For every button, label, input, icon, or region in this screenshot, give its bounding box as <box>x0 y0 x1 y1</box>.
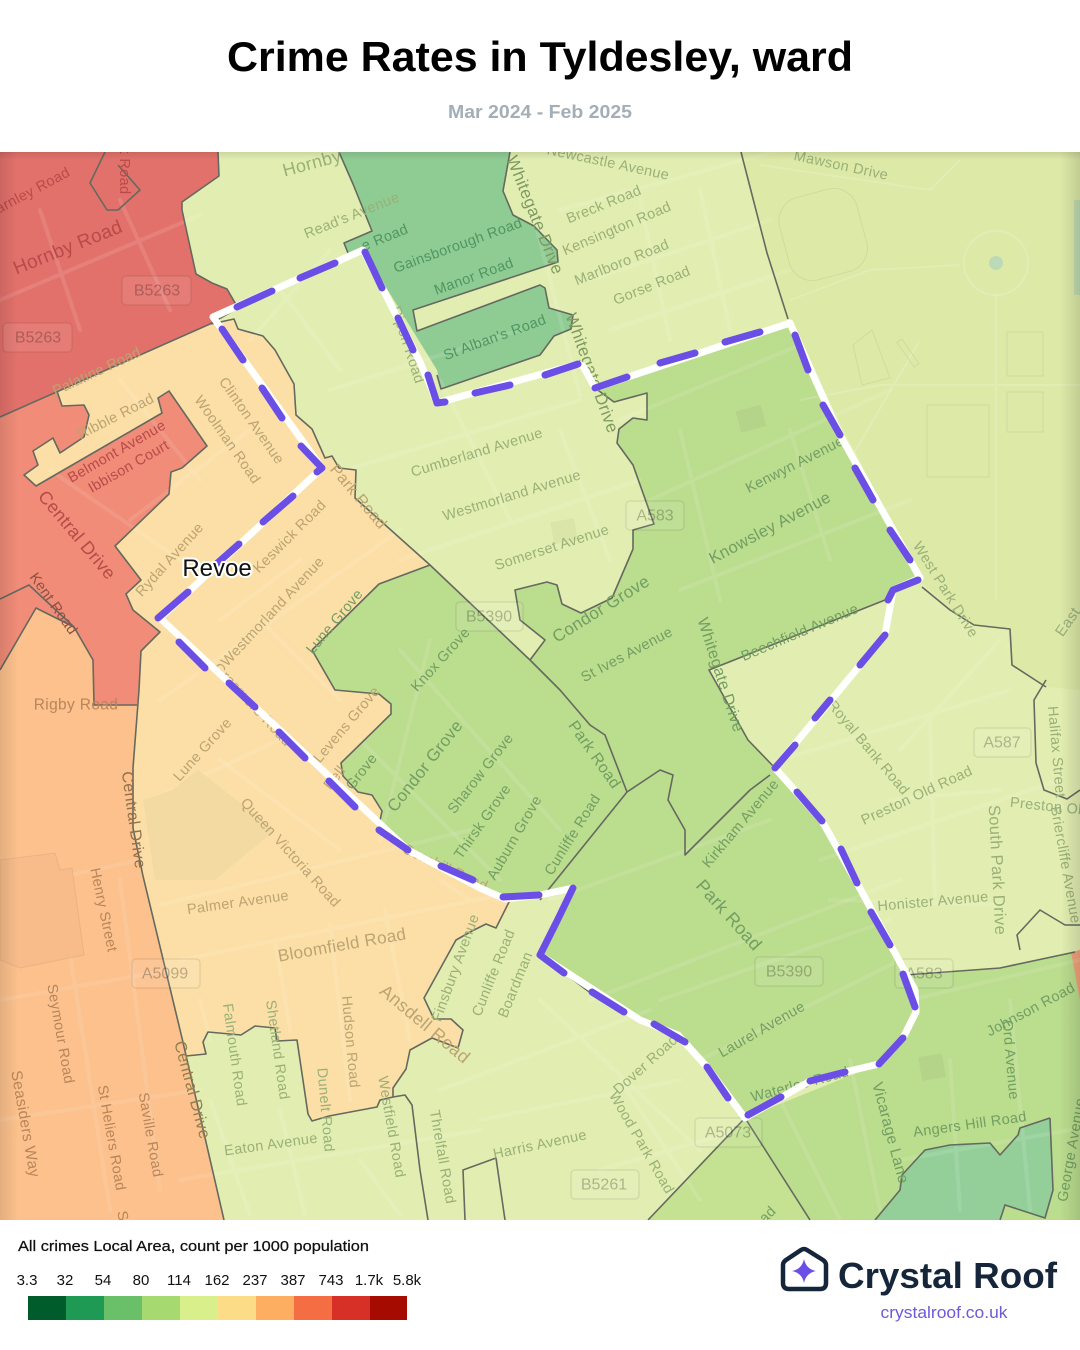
road labels on beige zones: Levens Grove <box>311 684 383 766</box>
road network <box>0 150 1080 1220</box>
map edge shading <box>0 152 1080 1220</box>
legend scale numbers: 114 <box>167 1272 191 1289</box>
road shields: A5073 <box>705 1124 751 1142</box>
road labels on beige zones: Cornhill Road <box>400 841 490 895</box>
legend scale numbers: 237 <box>242 1272 268 1289</box>
road shields: B5263 <box>134 282 180 300</box>
road labels on green zones: Condor Grove <box>383 716 467 816</box>
road labels on beige zones <box>50 345 490 1089</box>
road labels on red zones: Belmont Avenue <box>65 418 169 486</box>
zone boundaries <box>0 152 1080 1220</box>
road labels on beige zones: Ansdell Road <box>376 981 474 1067</box>
legend scale numbers: 3.3 <box>17 1272 37 1289</box>
park paths and pitches <box>760 160 1080 600</box>
legend scale numbers: 54 <box>95 1272 111 1289</box>
road labels on red zones: t Road <box>116 150 132 194</box>
road labels on beige zones: Park Road <box>326 461 390 533</box>
road labels on lime zones: Eaton Avenue <box>223 1131 319 1159</box>
road labels on lime zones: Halifax Street <box>1044 706 1068 798</box>
road labels on lime zones: Marlboro Road <box>572 237 672 289</box>
road labels on lime zones: Mawson Drive <box>792 148 890 184</box>
icon: house with star <box>783 1249 826 1289</box>
legend scale numbers: 743 <box>318 1272 344 1289</box>
road shields <box>3 276 1031 1199</box>
road labels on lime zones: Westfield Road <box>374 1075 408 1179</box>
ward boundary: purple dashes <box>158 252 918 1115</box>
road labels on dark green zone <box>359 215 548 364</box>
road labels on orange zones: S <box>113 1210 131 1222</box>
road labels on lime zones: Westmorland Avenue <box>441 467 583 525</box>
logo: Crystal Roof <box>783 1249 1058 1322</box>
stadium block <box>0 853 84 968</box>
road labels on green zones: Kenwyn Avenue <box>743 433 847 497</box>
road shields: B5261 <box>581 1176 627 1194</box>
road labels on lime zones: Boardman <box>496 950 536 1020</box>
road labels on beige zones: Lune Grove <box>171 715 235 785</box>
road labels on green zones: Beechfield Avenue <box>739 601 861 665</box>
road labels on green zones: Lune Grove <box>303 586 367 658</box>
zone: dark green north <box>339 152 573 389</box>
road labels on lime zones: Falmouth Road <box>219 1003 249 1107</box>
road labels on green zones: Whitegate Drive <box>694 616 746 734</box>
road labels on orange zones <box>7 696 214 1222</box>
road labels on red zones: Kent Road <box>26 570 80 638</box>
road labels on lime zones: Cumberland Avenue <box>409 425 545 481</box>
road labels on green zones: Cunliffe Road <box>542 792 604 878</box>
road labels on beige zones: Queen Victoria Road <box>237 795 343 911</box>
zone: orange Seasiders area <box>0 608 224 1220</box>
road shields: B5390 <box>466 608 512 626</box>
legend scale numbers: 80 <box>133 1272 149 1289</box>
zone: park area <box>741 152 1080 690</box>
road labels on lime zones: Harris Avenue <box>492 1127 588 1163</box>
legend scale numbers: 162 <box>204 1272 230 1289</box>
road labels on lime zones: Breck Road <box>564 183 644 227</box>
road labels on green zones: Angers Hill Road <box>912 1109 1028 1141</box>
road labels on orange zones: Central Drive <box>170 1039 214 1141</box>
road labels on beige zones: Bell <box>321 763 349 793</box>
road labels on beige zones: Grasmere Road <box>209 660 295 750</box>
title: Crime Rates in Tyldesley, ward <box>227 33 853 80</box>
legend scale numbers: 1.7k <box>355 1272 384 1289</box>
road labels on dark green zone: Gainsborough Road <box>391 215 525 277</box>
road shields: A583 <box>636 508 674 524</box>
road labels on red zones: Hornby Road <box>10 217 126 279</box>
zone: lower green triangle <box>648 1118 810 1220</box>
beige park patch <box>148 774 206 802</box>
road labels on green zones: Knox Grove <box>408 625 474 695</box>
legend <box>17 1238 422 1320</box>
road labels on dark green zone: Manor Road <box>432 255 516 299</box>
road labels on green zones: Kirkham Avenue <box>699 777 783 871</box>
logo wordmark: Crystal Roof <box>838 1255 1058 1296</box>
road labels on lime zones: Dover Road <box>611 1032 681 1098</box>
legend scale numbers <box>17 1272 422 1289</box>
road labels on beige zones: Westmorland Avenue <box>218 554 328 670</box>
road labels on lime zones: Newcastle Avenue <box>545 142 671 184</box>
road shields: A583 <box>905 966 943 982</box>
zone: red Hornby area <box>0 152 238 417</box>
road labels on beige zones: Keswick Road <box>250 497 330 577</box>
road labels on lime zones: Threlfall Road <box>426 1109 458 1205</box>
road labels on green zones: ad <box>756 1203 780 1227</box>
road labels on green zones: Ord Avenue <box>999 1020 1021 1100</box>
road labels on beige zones: Ribble Road <box>75 391 157 443</box>
logo url: crystalroof.co.uk <box>880 1304 1008 1322</box>
road labels on orange zones: Saville Road <box>135 1091 165 1179</box>
road labels on lime zones: Honister Avenue <box>877 889 989 915</box>
road labels on lime zones: Read's Avenue <box>302 190 402 242</box>
road labels on green zones: St Ives Avenue <box>578 624 676 686</box>
subtitle: date range: Mar 2024 - Feb 2025 <box>448 102 632 122</box>
road labels on green zones: Auburn Grove <box>484 793 546 883</box>
road labels on green zones: Park Road <box>692 876 766 954</box>
road labels on lime zones: Kensington Road <box>560 199 674 259</box>
legend colour bar <box>28 1296 407 1320</box>
road labels on orange zones: Seymour Road <box>43 983 77 1085</box>
zone: salmon Central Drive area <box>0 391 207 705</box>
road labels on green zones: Waterloo Road <box>749 1064 851 1106</box>
road shields: A587 <box>983 734 1021 752</box>
zone: beige Revoe area <box>24 319 511 1121</box>
road labels on green zones: Thirsk Grove <box>451 782 515 862</box>
legend scale numbers: 5.8k <box>393 1272 422 1289</box>
road labels on lime zones: Gorse Road <box>611 263 693 309</box>
road labels on lime zones: Preston Old Road <box>859 763 975 829</box>
place label: Revoe: Revoe <box>182 555 252 582</box>
road labels on lime zones: Ripon Road <box>387 304 427 386</box>
zone: south-east green <box>745 952 1080 1220</box>
road labels on beige zones: Woolman Road <box>191 393 263 487</box>
road labels on orange zones: Central Drive <box>118 770 148 870</box>
road labels on beige zones: Rydal Avenue <box>133 520 207 600</box>
road labels on orange zones: St Heliers Road <box>94 1084 128 1192</box>
zone: dark green south-east <box>875 1118 1053 1220</box>
road labels on beige zones: Palatine Road <box>50 345 144 399</box>
road labels on lime zones: Whitegate Drive <box>561 310 623 436</box>
road labels on orange zones: Seasiders Way <box>7 1069 43 1179</box>
road shields: B5390 <box>766 964 812 980</box>
road labels on beige zones: Hudson Road <box>338 995 362 1089</box>
road labels on red zones: Central Drive <box>34 487 120 583</box>
road labels on green zones <box>303 433 1080 1227</box>
road labels on lime zones: South Park Drive <box>985 804 1009 936</box>
ward boundary: white line <box>160 250 920 1118</box>
road labels on dark green zone: e Road <box>359 221 411 255</box>
road labels on beige zones: Bloomfield Road <box>276 924 408 966</box>
road shields: B5263 <box>15 330 61 346</box>
legend scale numbers: 387 <box>280 1272 306 1289</box>
road labels on lime zones: Somerset Avenue <box>493 522 611 574</box>
road labels on lime zones: West Park Drive <box>909 539 981 641</box>
zone: green central blocks <box>312 323 920 1118</box>
road labels on lime zones: Finsbury Avenue <box>429 912 483 1024</box>
legend title: All crimes Local Area, count per 1000 population <box>18 1238 369 1255</box>
road labels on green zones: Knowsley Avenue <box>706 488 834 568</box>
road labels on green zones: Vicarage Lane <box>868 1080 912 1186</box>
legend scale numbers: 32 <box>57 1272 73 1289</box>
road labels on lime zones: Hornby <box>280 146 344 180</box>
road labels on green zones: Grove <box>343 751 381 793</box>
road labels on lime zones: Cunliffe Road <box>469 927 519 1019</box>
road labels on lime zones: Shetland Road <box>262 999 292 1101</box>
road labels on lime zones: Dunelt Road <box>313 1067 337 1153</box>
road labels on green zones: Condor Grove <box>549 572 653 646</box>
road labels on red zones <box>0 150 172 638</box>
building patches <box>550 405 946 1081</box>
zone: orange sliver right edge <box>1071 950 1080 1000</box>
road labels on beige zones: Palmer Avenue <box>186 888 290 918</box>
road shields: A5099 <box>142 966 188 982</box>
road labels on green zones: Park Road <box>564 718 624 792</box>
road labels on lime zones <box>219 142 1080 1205</box>
road labels on orange zones: Rigby Road <box>34 696 118 714</box>
road labels on red zones: Ibbison Court <box>86 437 172 497</box>
road labels on lime zones: Royal Bank Road <box>824 698 912 798</box>
road labels on green zones: Johnson Road <box>984 980 1078 1040</box>
road labels on orange zones: Henry Street <box>86 866 120 954</box>
road labels on lime zones: Whitegate Drive <box>503 153 567 277</box>
road labels on green zones: Sharow Grove <box>445 731 517 817</box>
road labels on lime zones: Wood Park Road <box>605 1089 677 1197</box>
road labels on green zones: Laurel Avenue <box>716 999 808 1061</box>
road labels on beige zones: Clinton Avenue <box>215 375 287 467</box>
road labels on dark green zone: St Alban's Road <box>442 312 548 364</box>
